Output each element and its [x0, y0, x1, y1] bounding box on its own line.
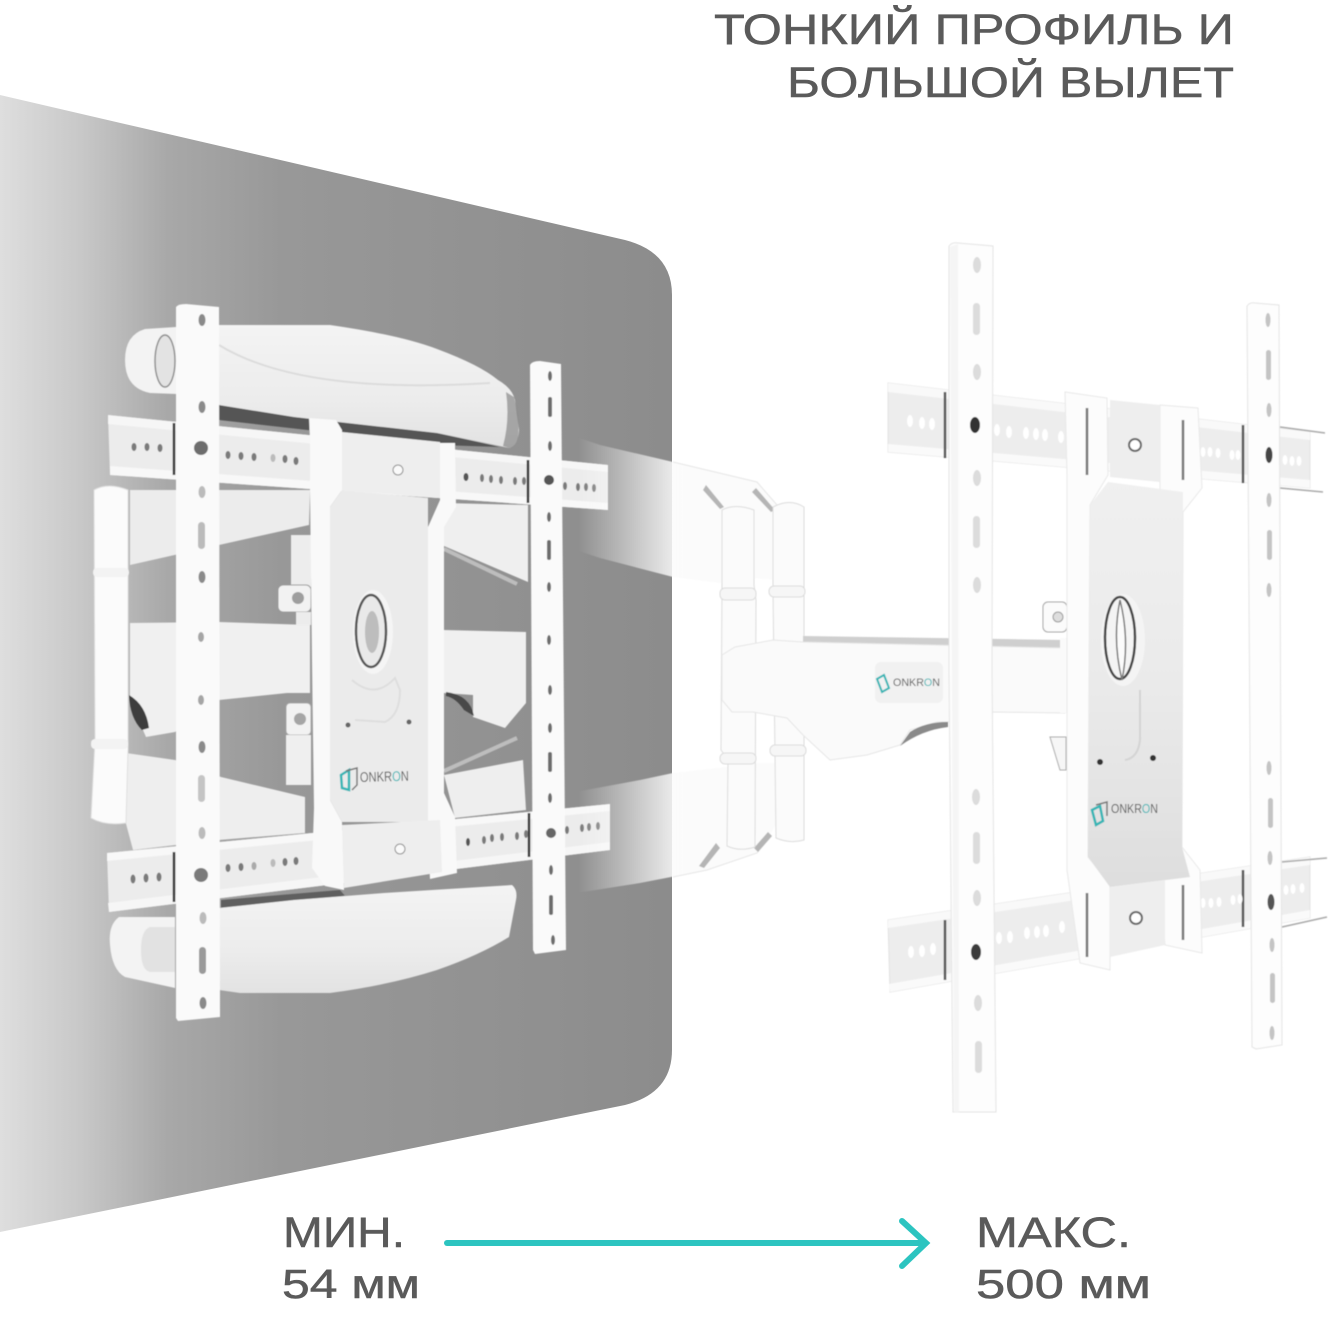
bottom rail — [888, 857, 1327, 992]
left vertical strip — [176, 304, 220, 1021]
logo: plate — [341, 768, 409, 790]
vertical handle — [91, 486, 129, 824]
upper arm fading from the wall — [570, 435, 777, 583]
left vertical strip — [949, 243, 996, 1112]
lower arm bottom edge — [673, 835, 770, 877]
hinge brackets — [1043, 602, 1068, 770]
title: ТОНКИЙ ПРОФИЛЬ И — [714, 5, 1234, 54]
upper arm top edge — [673, 462, 777, 505]
right vertical strip — [530, 361, 566, 954]
logo: arm — [875, 662, 943, 703]
upper wall arm — [125, 325, 519, 448]
upper arm gap shading — [703, 485, 775, 512]
hinge brackets — [278, 535, 311, 785]
lower arm gap shading — [699, 832, 772, 868]
label: minimum: 54 мм — [282, 1261, 420, 1307]
right vertical strip — [1247, 303, 1282, 1049]
label: maximum — [976, 1209, 1151, 1307]
label: minimum: МИН. — [283, 1209, 405, 1257]
cross rail top — [108, 415, 608, 510]
main arm — [722, 636, 1065, 760]
title: БОЛЬШОЙ ВЫЛЕТ — [787, 58, 1234, 107]
lower wall arm — [110, 885, 516, 993]
label: minimum — [282, 1209, 420, 1307]
label: maximum: МАКС. — [976, 1209, 1131, 1257]
central plate — [309, 418, 457, 890]
top rail — [888, 383, 1325, 492]
logo: arm: ONKRON — [893, 677, 940, 689]
folded links — [125, 490, 528, 850]
label: maximum: 500 мм — [976, 1261, 1151, 1307]
extended arm — [570, 435, 1065, 894]
lower arm fading from the wall — [570, 763, 782, 894]
cross rail bottom — [107, 804, 610, 912]
logo: plate: ONKRON — [360, 768, 409, 785]
logo: plate: ONKRON — [1111, 801, 1158, 816]
mount folded against the wall — [91, 304, 610, 1021]
arm pivots — [720, 502, 806, 849]
central plate — [1065, 392, 1202, 970]
arrow — [447, 1221, 926, 1266]
logo: plate — [1092, 801, 1158, 825]
title — [714, 5, 1234, 107]
wall panel — [0, 95, 672, 1232]
extended TV bracket — [888, 243, 1327, 1112]
